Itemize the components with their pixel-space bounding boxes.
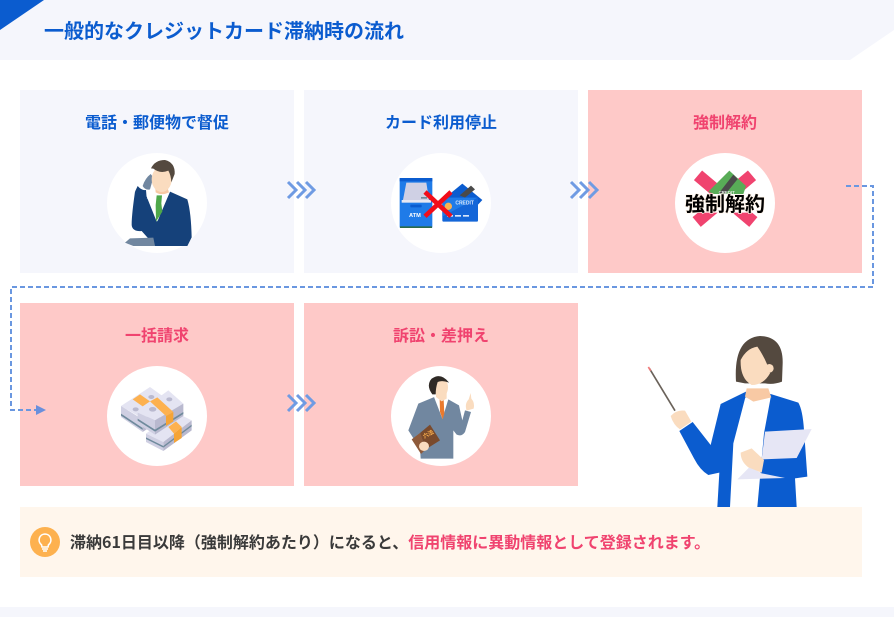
title: 一般的なクレジットカード滞納時の流れ xyxy=(44,21,404,43)
panel: lawsuit and seizure xyxy=(304,303,578,486)
callout: note box xyxy=(20,507,862,577)
icon: lawyer with book xyxy=(391,366,491,466)
heading: forced cancellation: 強制解約 xyxy=(693,115,757,132)
icon: cancelled card: CREDIT xyxy=(719,190,735,195)
icon: ATM and credit card crossed out: ATM xyxy=(409,213,421,219)
heading: lump-sum demand: 一括請求 xyxy=(125,328,189,345)
arrow: step 1 to 2 xyxy=(287,181,316,199)
icon: lawyer with book: 六法 xyxy=(421,428,435,440)
icon: cancelled card: 強制解約 xyxy=(685,193,765,216)
arrow: dashed connector from step 3 to step 4 xyxy=(10,185,874,415)
text: note message: 滞納61日目以降（強制解約あたり）になると、信用情報に異動情報として登録されます。 xyxy=(70,529,710,553)
heading: card suspended: カード利用停止 xyxy=(385,115,497,132)
icon: stacks of banknotes xyxy=(107,366,207,466)
icon: ATM and credit card crossed out: CREDIT xyxy=(455,201,474,207)
illustration: woman with pointer and clipboard xyxy=(648,336,812,507)
arrow: step 2 to 3 xyxy=(570,181,599,199)
panel: phone and mail reminder xyxy=(20,90,294,273)
icon: cancelled card xyxy=(675,153,775,253)
arrow: step 4 to 5 xyxy=(287,394,316,412)
icon: man on phone xyxy=(107,153,207,253)
heading: lawsuit and seizure: 訴訟・差押え xyxy=(393,328,489,345)
footer band xyxy=(0,607,894,617)
icon: light bulb xyxy=(30,527,60,557)
panel: forced cancellation xyxy=(588,90,862,273)
panel: card suspended xyxy=(304,90,578,273)
heading: phone and mail reminder: 電話・郵便物で督促 xyxy=(85,115,229,132)
panel: lump-sum demand xyxy=(20,303,294,486)
header band xyxy=(0,0,894,60)
icon: ATM and credit card crossed out xyxy=(391,153,491,253)
